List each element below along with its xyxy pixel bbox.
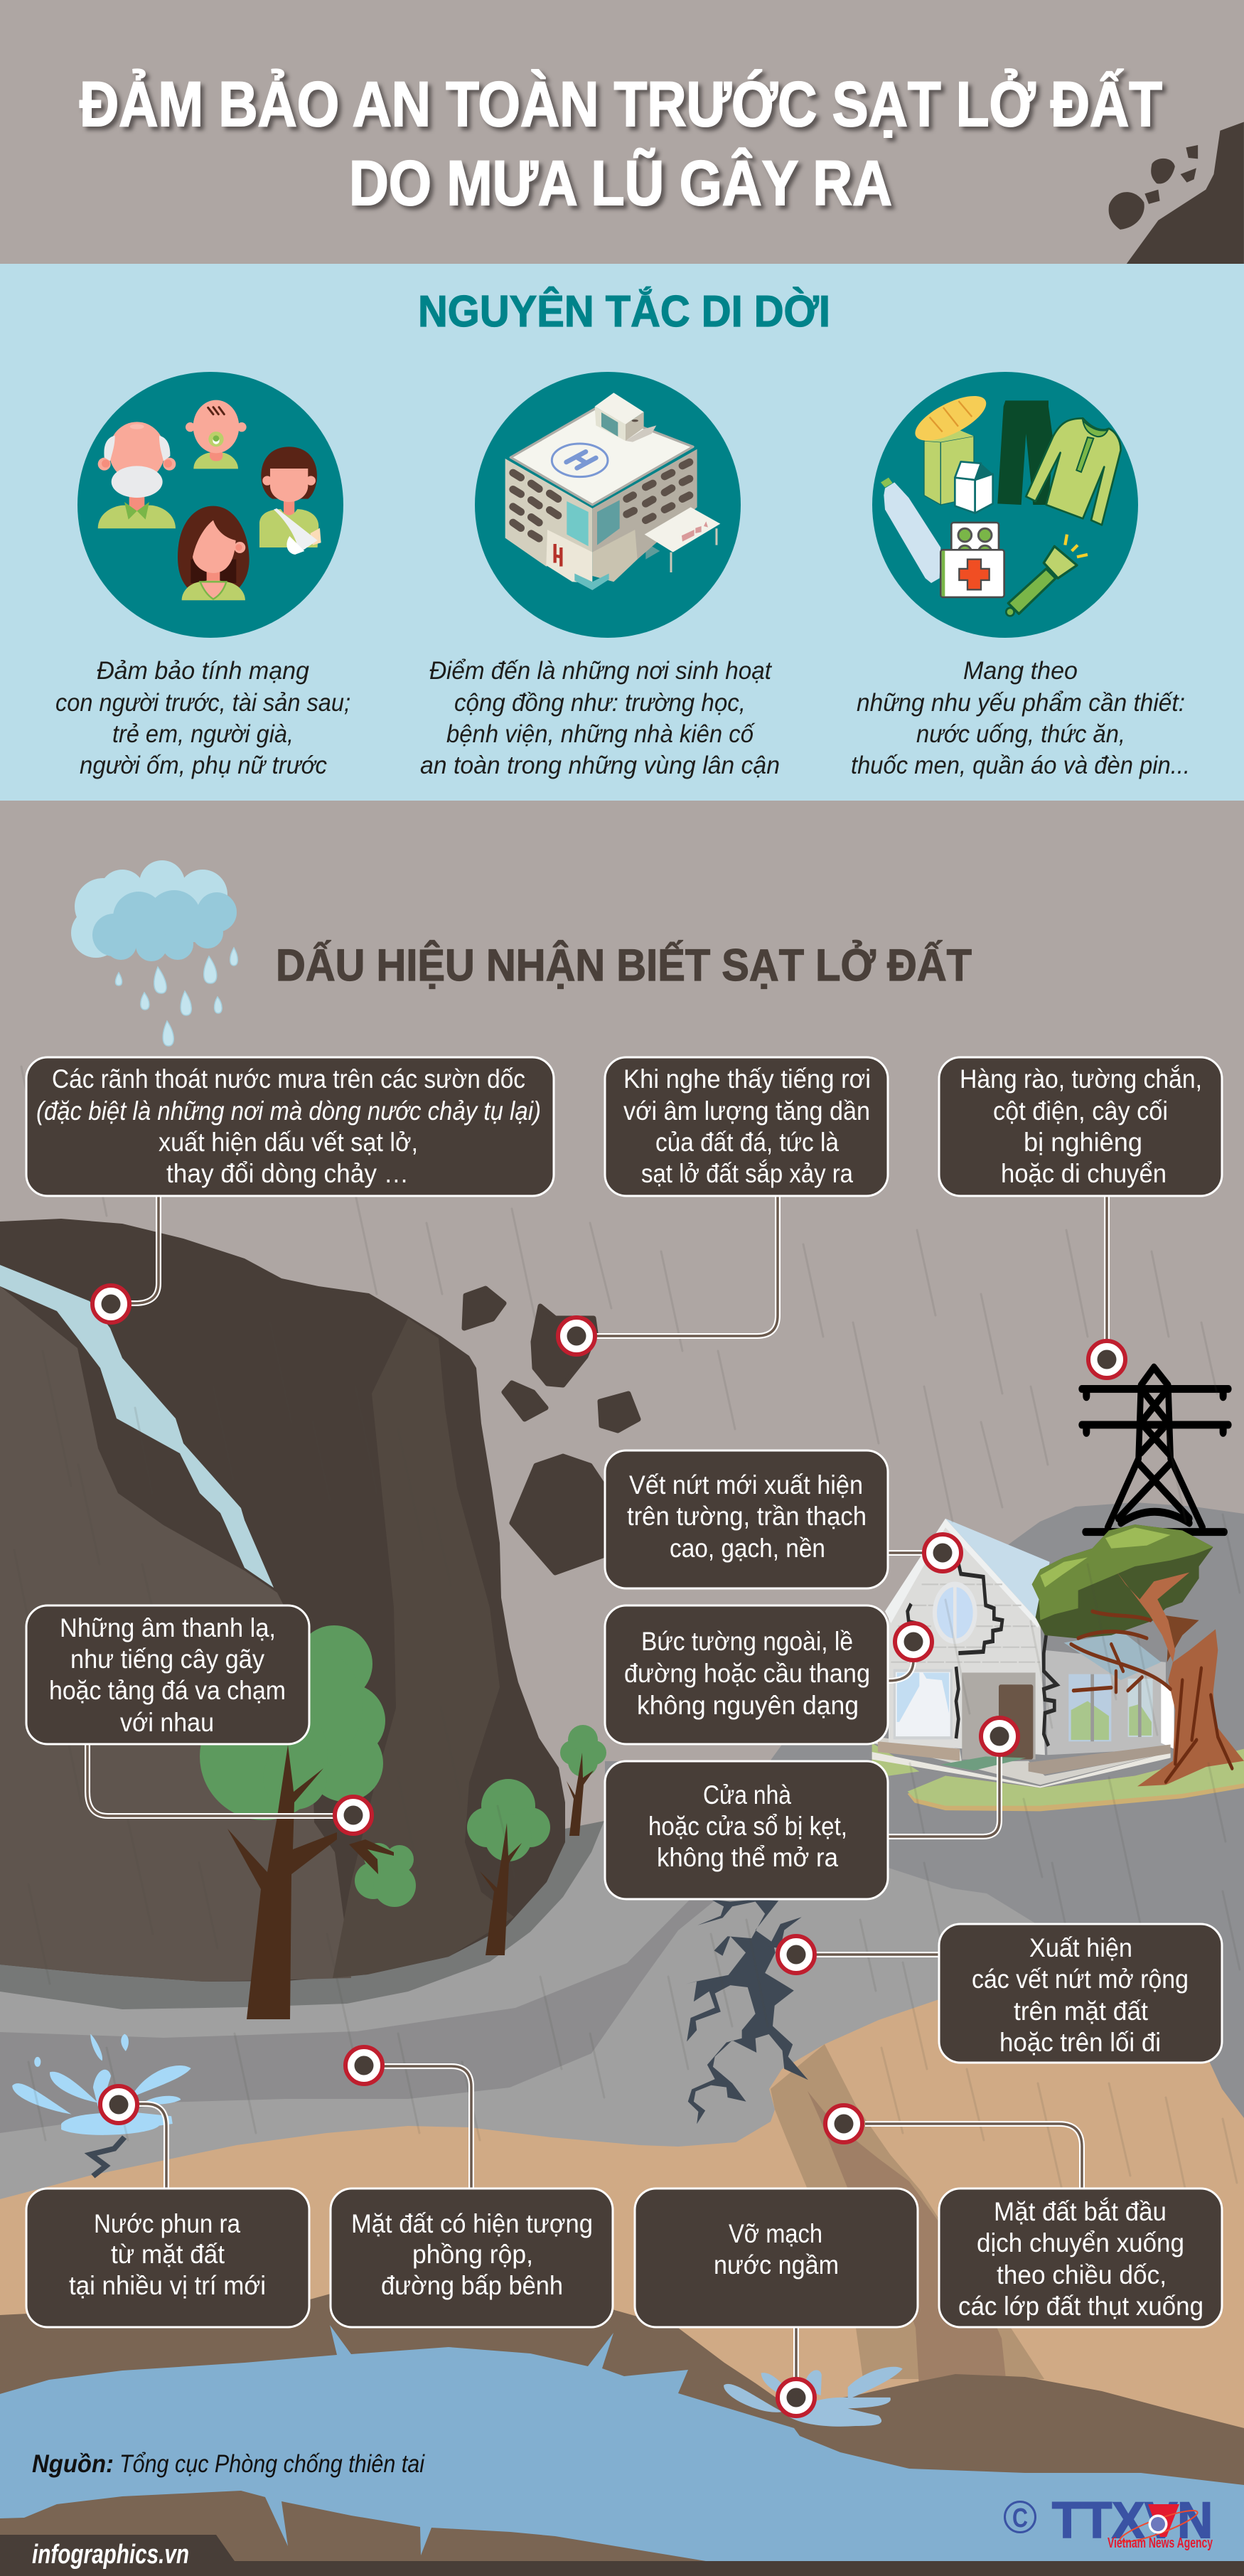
callout: strange sounds: Những âm thanh lạ,: [60, 1613, 276, 1642]
sand ground: [0, 1999, 1244, 2576]
callout: new wall cracks: Vết nứt mới xuất hiện: [629, 1470, 863, 1500]
callout: new wall cracks: cao, gạch, nền: [670, 1534, 825, 1563]
callout: water spurting: tại nhiều vị trí mới: [69, 2271, 266, 2300]
marker: broken tree: [335, 1797, 372, 1834]
marker: ground crack: [778, 1936, 815, 1973]
callout: falling rock sounds: sạt lở đất sắp xảy ra: [641, 1159, 853, 1188]
callout: jammed doors: không thể mở ra: [657, 1843, 838, 1872]
light road: [0, 1821, 1173, 2218]
front wall: [889, 1520, 1045, 1755]
panel: warning signs scene: [0, 860, 1244, 2576]
marker: wall crack: [924, 1534, 961, 1571]
callout: water spurting: Nước phun ra: [94, 2209, 240, 2238]
footer bar: [0, 2535, 1244, 2576]
callout: sliding ground: dịch chuyển xuống: [977, 2228, 1184, 2257]
callout: deformed walls: đường hoặc cầu thang: [624, 1659, 870, 1688]
callout: groundwater break: nước ngầm: [714, 2250, 839, 2280]
marker: groundwater: [778, 2379, 815, 2416]
mountain: [0, 1219, 565, 1982]
callout: strange sounds: với nhau: [120, 1708, 214, 1737]
connector: ground cracks: [814, 1952, 939, 1957]
text block: destinations: Điểm đến là những nơi sinh hoạt: [429, 657, 772, 685]
marker: tower: [1088, 1341, 1125, 1378]
connector: drainage box to stream: [124, 1196, 159, 1303]
callout: falling rock sounds: Khi nghe thấy tiếng rơi: [623, 1064, 871, 1094]
marker: sliding ground: [825, 2105, 862, 2142]
connector: groundwater break: [793, 2327, 799, 2378]
callout: bulging ground: phồng rộp,: [412, 2240, 533, 2269]
icon: rain cloud: [71, 860, 237, 1046]
house: [872, 1519, 1244, 1811]
callout: widening ground cracks: [939, 1924, 1222, 2063]
callout: widening ground cracks: Xuất hiện: [1029, 1933, 1132, 1962]
panel: header: [80, 68, 1244, 264]
connector: jammed door: [888, 1753, 999, 1837]
marker: stream: [92, 1286, 129, 1322]
mountain shadow on road: [0, 1821, 604, 2009]
heading: relocation principles: NGUYÊN TẮC DI DỜI: [418, 287, 830, 336]
text block: supplies to bring: nước uống, thức ăn,: [916, 720, 1125, 748]
marker: door: [981, 1718, 1018, 1755]
callout: bulging ground: đường bấp bênh: [381, 2271, 563, 2300]
text block: supplies to bring: thuốc men, quần áo và đèn pin...: [851, 752, 1190, 779]
logo: TTXVN: TTXVN: [1052, 2493, 1213, 2549]
text block: supplies to bring: Mang theo: [963, 657, 1078, 685]
ground cracks: [686, 1900, 808, 2124]
connector: tilt box to tower: [1104, 1196, 1110, 1340]
callout: jammed doors: [605, 1761, 888, 1899]
callout: falling rock sounds: [605, 1057, 888, 1196]
marker: falling rock: [558, 1318, 595, 1354]
tree trunk: [1137, 1629, 1244, 1786]
callout: strange sounds: hoặc tảng đá va chạm: [49, 1676, 286, 1705]
small tree: [467, 1779, 550, 1955]
icon: hospital circle: [475, 372, 741, 638]
lower soil layer: [0, 2491, 706, 2576]
right wing wall and roof: [1045, 1650, 1166, 1755]
connector: strange sounds: [87, 1745, 334, 1816]
text block: supplies to bring: những nhu yếu phẩm cần thiết:: [857, 689, 1185, 717]
callout: widening ground cracks: hoặc trên lối đi: [999, 2028, 1161, 2057]
connector: bulging ground: [377, 2066, 471, 2188]
callout: falling rock sounds: với âm lượng tăng dần: [623, 1096, 870, 1126]
big tree: [200, 1625, 385, 2019]
source credit: Nguồn:: [32, 2450, 114, 2478]
callout: bulging ground: [331, 2188, 613, 2327]
source credit: [32, 2450, 425, 2478]
title: DO MƯA LŨ GÂY RA: [349, 147, 892, 218]
callout: sliding ground: theo chiều dốc,: [997, 2260, 1167, 2289]
callout: jammed doors: Cửa nhà: [703, 1780, 791, 1810]
text block: safety priority: [55, 657, 350, 779]
landslide scar: [771, 2044, 1044, 2379]
callout: groundwater break: Vỡ mạch: [729, 2219, 822, 2248]
heading: warning signs with cloud: [71, 860, 972, 1046]
connector: deformed wall: [888, 1660, 913, 1681]
callout: deformed walls: [605, 1605, 888, 1744]
water splash right: [724, 2367, 903, 2427]
landslide scar deep: [808, 2091, 1006, 2388]
round window: [935, 1584, 975, 1641]
callout: sliding ground: các lớp đất thụt xuống: [958, 2292, 1203, 2321]
callout: widening ground cracks: trên mặt đất: [1014, 1997, 1149, 2026]
steps: [878, 1741, 960, 1761]
callout: drainage channels: [26, 1057, 554, 1196]
dark road and hill: [605, 1502, 1244, 2204]
icon: falling rocks at header corner: [1109, 122, 1244, 264]
callout: tilting structures: cột điện, cây cối: [993, 1096, 1168, 1126]
falling rocks: [464, 1288, 638, 1573]
callout: deformed walls: Bức tường ngoài, lề: [641, 1627, 853, 1656]
callout: tilting structures: hoặc di chuyển: [1001, 1159, 1167, 1188]
road band: [0, 1899, 717, 2133]
callout: tilting structures: [939, 1057, 1222, 1196]
text block: safety priority: người ốm, phụ nữ trước: [80, 752, 327, 779]
logo: TTXVN: C: [1012, 2503, 1028, 2533]
text block: supplies to bring: [851, 657, 1190, 779]
source credit: Tổng cục Phòng chống thiên tai: [119, 2450, 425, 2478]
groundwater: [0, 2325, 1244, 2576]
callout: widening ground cracks: các vết nứt mở rộng: [972, 1965, 1189, 1994]
callout: deformed walls: không nguyên dạng: [637, 1691, 859, 1720]
callout: sliding ground: [939, 2188, 1222, 2327]
stream on mountain: [0, 1265, 274, 1588]
callout: bulging ground: Mặt đất có hiện tượng: [351, 2209, 593, 2238]
callout: groundwater break: [635, 2188, 918, 2327]
marker: bulging ground: [345, 2047, 382, 2084]
panel: relocation principles: [0, 264, 1244, 801]
connector: wall crack: [888, 1550, 924, 1556]
text block: destinations: [420, 657, 780, 779]
connector: rock sound box to rock: [594, 1196, 778, 1336]
brown soil layer: [0, 2294, 1244, 2496]
callout: tilting structures: Hàng rào, tường chắn,: [960, 1064, 1202, 1094]
website credit: infographics.vn: [32, 2540, 189, 2570]
title: [80, 68, 1162, 218]
icon: people circle: [77, 372, 343, 638]
power tower: [1082, 1367, 1228, 1532]
wall cracks: [908, 1564, 1057, 1746]
text block: destinations: bệnh viện, những nhà kiên cố: [446, 720, 755, 748]
marker: spurting water: [100, 2086, 137, 2123]
broken tree branch: [349, 1839, 416, 1907]
connector: water spurting: [135, 2104, 166, 2188]
callout: water spurting: từ mặt đất: [111, 2240, 225, 2269]
callout: drainage channels: thay đổi dòng chảy …: [166, 1159, 409, 1188]
tree foliage: [1032, 1524, 1213, 1638]
small tree far: [560, 1725, 606, 1836]
callout: drainage channels: Các rãnh thoát nước mưa trên các sườn dốc: [52, 1064, 525, 1094]
callout: water spurting: [26, 2188, 309, 2327]
lawn: [908, 1749, 1244, 1811]
callout: strange sounds: [26, 1605, 309, 1744]
callout: falling rock sounds: của đất đá, tức là: [655, 1128, 839, 1157]
callout: new wall cracks: trên tường, trần thạch: [627, 1502, 867, 1531]
text block: safety priority: Đảm bảo tính mạng: [97, 657, 310, 685]
door: [962, 1672, 1036, 1760]
callout: tilting structures: bị nghiêng: [1024, 1128, 1142, 1157]
heading: warning signs: DẤU HIỆU NHẬN BIẾT SẠT LỞ ĐẤT: [276, 940, 972, 990]
water splash left: [12, 2034, 191, 2176]
callout: drainage channels: xuất hiện dấu vết sạt lở,: [159, 1128, 418, 1157]
front window: [894, 1671, 951, 1738]
text block: destinations: cộng đồng như: trường học,: [454, 689, 746, 717]
text block: destinations: an toàn trong những vùng lân cận: [420, 752, 780, 779]
text block: safety priority: trẻ em, người già,: [112, 720, 294, 748]
callout: drainage channels: (đặc biệt là những nơi mà dòng nước chảy tụ lại): [36, 1096, 541, 1126]
icon: supplies circle: [872, 372, 1138, 638]
marker: outer wall: [895, 1623, 932, 1660]
callout: sliding ground: Mặt đất bắt đầu: [994, 2197, 1167, 2226]
connector: sliding ground: [865, 2124, 1082, 2189]
callout: new wall cracks: [605, 1450, 888, 1588]
text block: safety priority: con người trước, tài sản sau;: [55, 689, 350, 717]
callout: jammed doors: hoặc cửa sổ bị kẹt,: [648, 1812, 847, 1841]
callout: strange sounds: như tiếng cây gãy: [70, 1645, 264, 1674]
